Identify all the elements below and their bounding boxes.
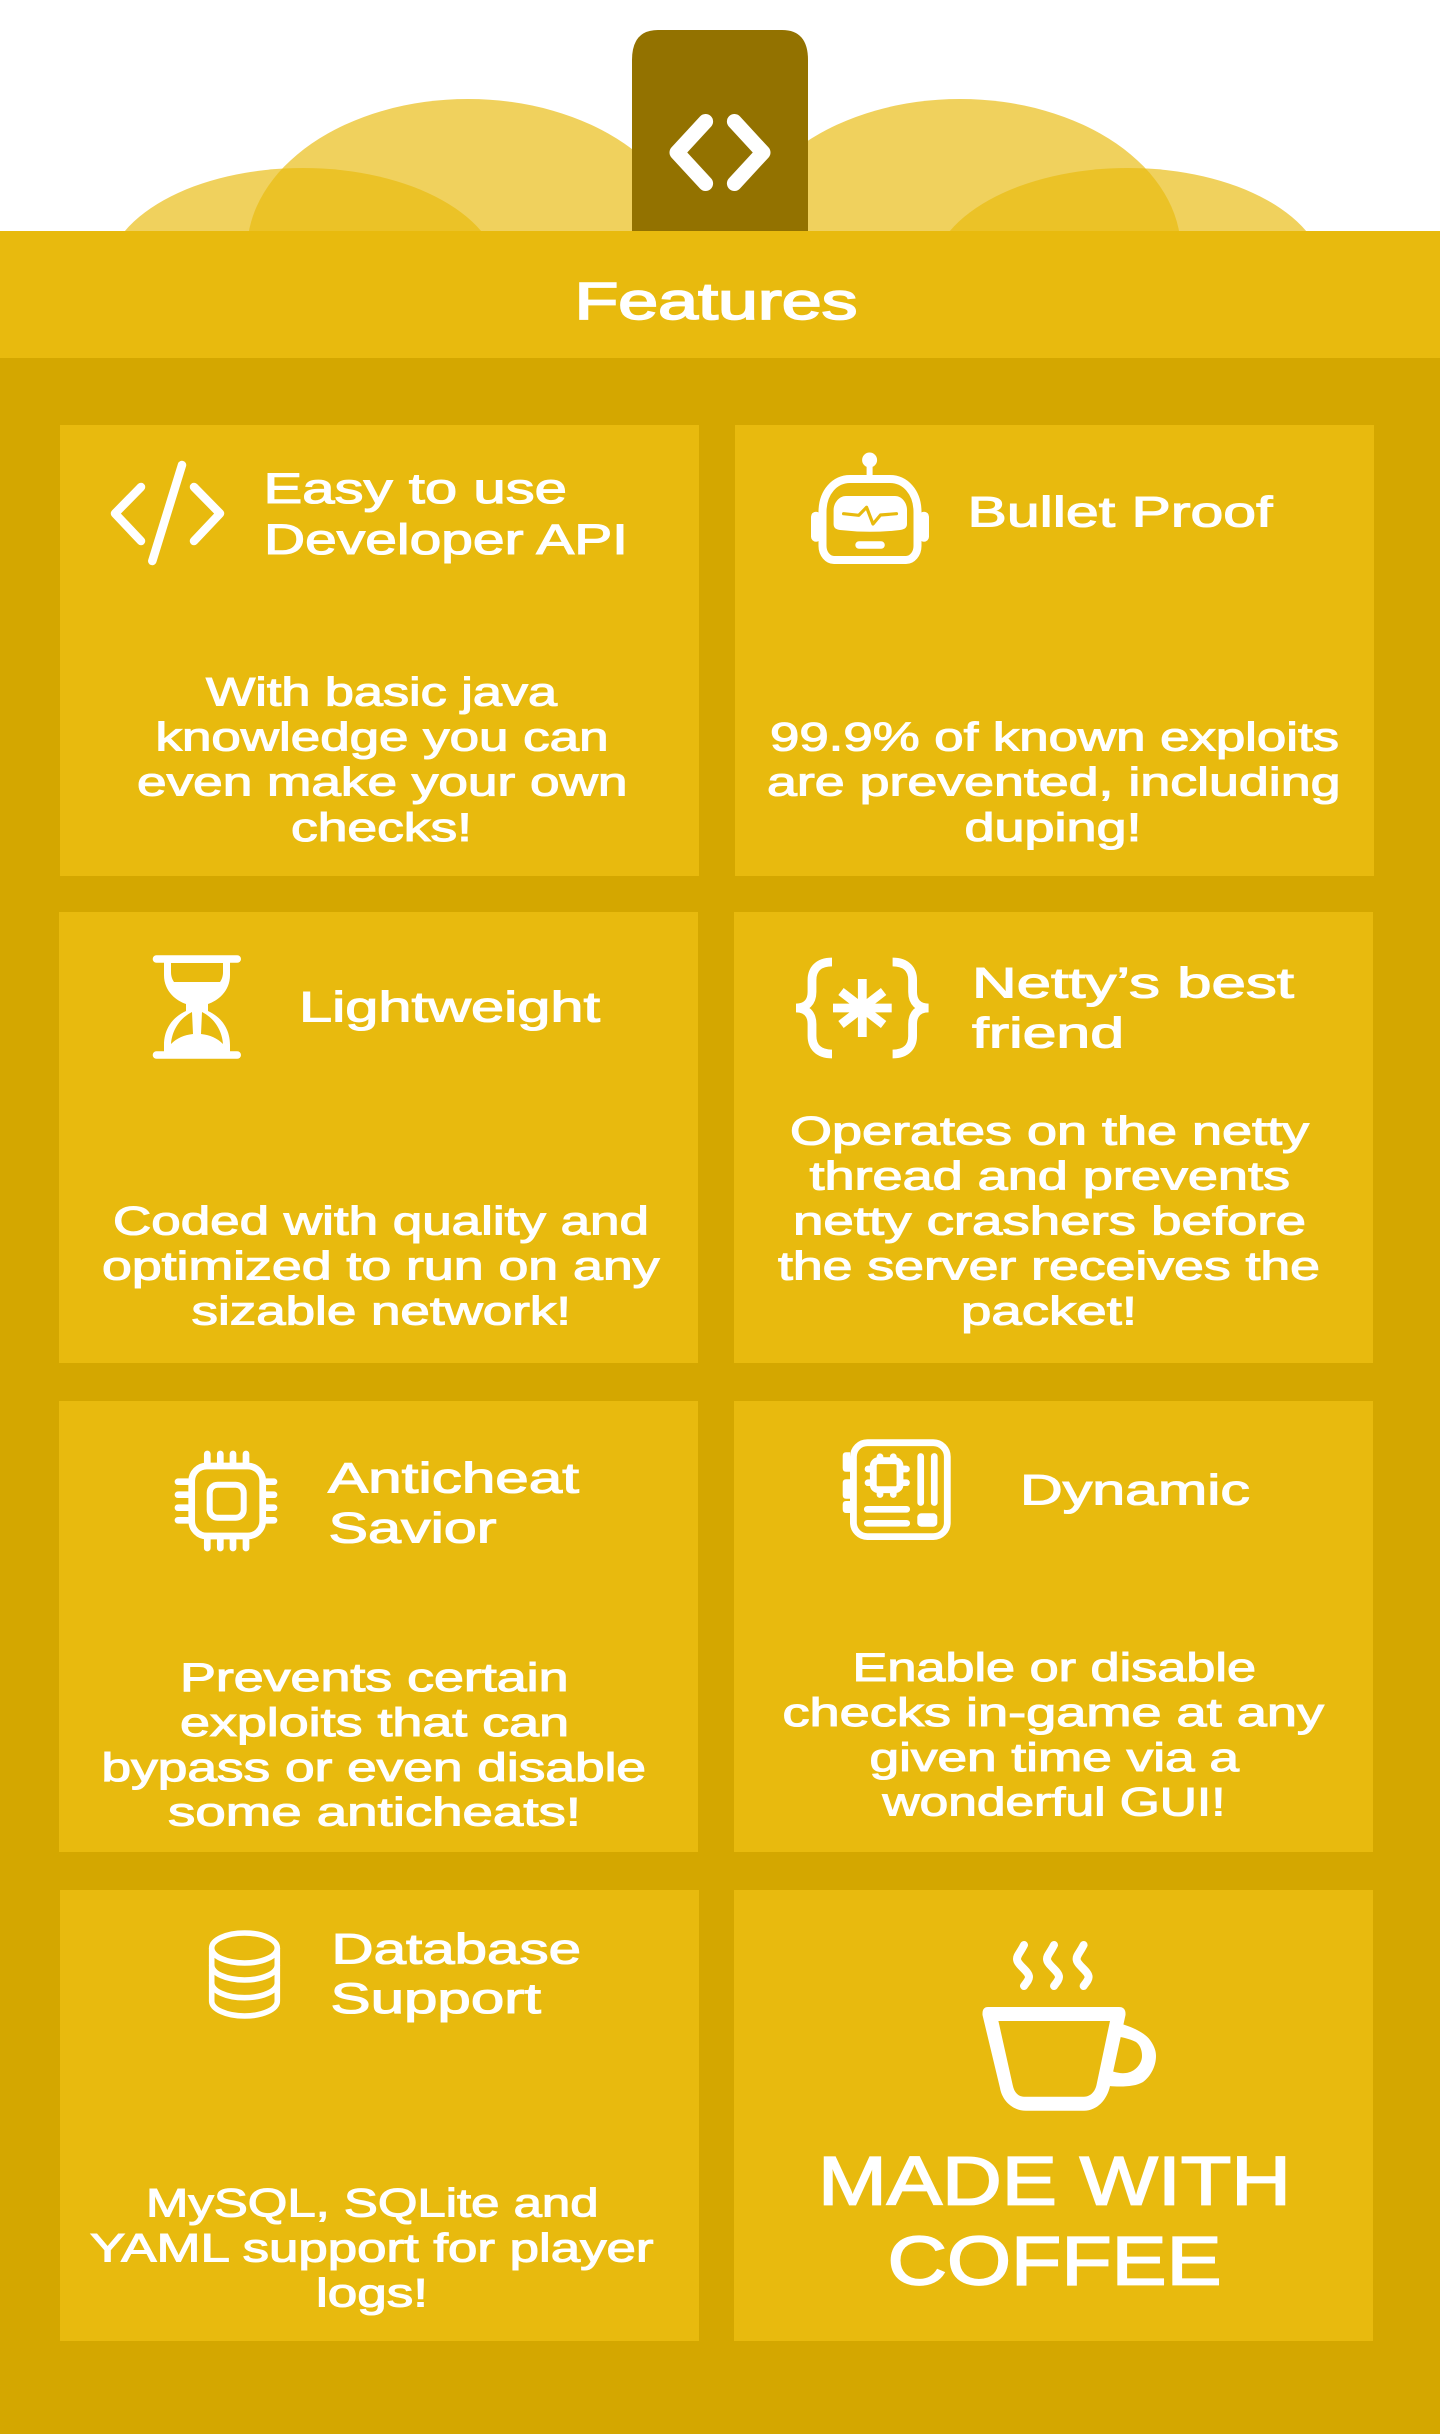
description — [767, 716, 1340, 850]
icon: code tag — [115, 465, 220, 561]
description: With basic java — [206, 671, 558, 715]
description: optimized to run on any — [102, 1244, 660, 1288]
description — [90, 2182, 654, 2316]
panel: bullet proof — [735, 425, 1374, 876]
header tab — [632, 30, 808, 231]
description — [778, 1109, 1320, 1333]
heading: Netty’s best — [972, 960, 1294, 1008]
panel: dynamic — [734, 1401, 1373, 1852]
description: knowledge you can — [156, 716, 608, 760]
icon: circuit board — [843, 1443, 947, 1537]
description — [137, 671, 628, 850]
description: MySQL, SQLite and — [146, 2182, 598, 2226]
panel: easy to use developer api — [60, 425, 699, 876]
title: Features — [574, 273, 858, 331]
description: Enable or disable — [852, 1646, 1256, 1690]
icon: microchip — [178, 1454, 274, 1548]
description: 99.9% of known exploits — [770, 716, 1339, 760]
heading: Bullet Proof — [968, 489, 1274, 537]
slogan: COFFEE — [888, 2222, 1222, 2300]
heading: Database — [332, 1925, 581, 1973]
heading — [328, 1455, 579, 1553]
description: Operates on the netty — [790, 1109, 1309, 1153]
description: netty crashers before — [793, 1199, 1306, 1243]
description: even make your own — [137, 761, 628, 805]
panel: made with coffee — [734, 1890, 1373, 2341]
heading — [330, 1925, 581, 2023]
description: checks! — [291, 806, 472, 850]
heading: friend — [972, 1010, 1124, 1058]
header hills — [106, 99, 1325, 403]
slogan — [818, 2142, 1291, 2300]
heading: Support — [330, 1975, 541, 2023]
title band — [0, 231, 1440, 358]
description: sizable network! — [192, 1289, 571, 1333]
panel: database support — [60, 1890, 699, 2341]
description: exploits that can — [180, 1701, 569, 1745]
heading: Savior — [328, 1505, 496, 1553]
description — [102, 1199, 660, 1333]
panel: lightweight — [59, 912, 698, 1363]
heading: Lightweight — [299, 984, 600, 1032]
description: checks in-game at any — [782, 1691, 1324, 1735]
description: logs! — [316, 2272, 428, 2316]
description — [782, 1646, 1324, 1825]
description: some anticheats! — [168, 1790, 581, 1834]
description: YAML support for player — [90, 2227, 654, 2271]
slogan: MADE WITH — [818, 2142, 1291, 2220]
heading: Developer API — [264, 516, 628, 564]
icon: header code chevrons — [677, 122, 763, 184]
heading: Easy to use — [264, 465, 567, 513]
description: wonderful GUI! — [881, 1781, 1226, 1825]
description: Prevents certain — [180, 1656, 568, 1700]
description: packet! — [961, 1289, 1137, 1333]
heading: Dynamic — [1020, 1466, 1250, 1514]
icon: robot head — [811, 452, 929, 560]
description: are prevented, including — [767, 761, 1340, 805]
description: given time via a — [870, 1736, 1240, 1780]
panel: netty's best friend — [734, 912, 1373, 1363]
description: bypass or even disable — [102, 1746, 646, 1790]
panel: anticheat savior — [59, 1401, 698, 1852]
icon: coffee cup — [982, 1945, 1156, 2111]
description: Coded with quality and — [113, 1199, 649, 1243]
heading — [972, 960, 1294, 1058]
icon: hourglass — [153, 955, 241, 1059]
icon: database — [212, 1933, 277, 2016]
description: the server receives the — [778, 1244, 1320, 1288]
description: thread and prevents — [810, 1154, 1290, 1198]
icon: braces with asterisk — [796, 962, 929, 1054]
heading — [264, 465, 628, 564]
heading: Anticheat — [328, 1455, 579, 1503]
description: duping! — [964, 806, 1142, 850]
description — [102, 1656, 646, 1834]
